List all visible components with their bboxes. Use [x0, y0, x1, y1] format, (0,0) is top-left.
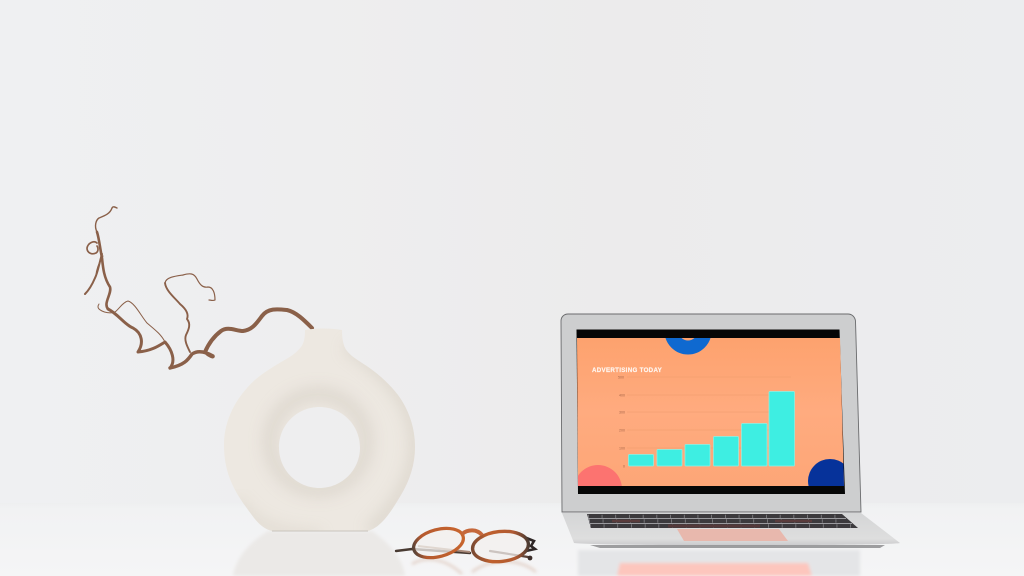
slide [577, 338, 844, 486]
glasses [396, 523, 535, 564]
axis labels: 400 [619, 394, 625, 398]
main branch [205, 309, 312, 352]
third branch [98, 301, 165, 342]
axis labels [618, 376, 625, 468]
temples [396, 549, 470, 553]
screen bezel [576, 330, 845, 494]
curly loop [87, 242, 98, 254]
right lens [471, 529, 530, 564]
slide title: ADVERTISING TODAY [592, 367, 663, 374]
plant branches [85, 207, 312, 368]
coral circle [578, 465, 622, 486]
slide background [577, 338, 844, 486]
axis labels: 200 [619, 428, 625, 432]
axis labels: 100 [619, 446, 625, 450]
vase body [224, 328, 416, 536]
keyboard [587, 514, 858, 528]
grid lines [627, 377, 794, 448]
axis labels: 300 [619, 410, 625, 414]
laptop reflection [578, 550, 860, 576]
vase shading [250, 353, 415, 530]
laptop base [562, 513, 900, 545]
vase reflection [233, 531, 405, 576]
side twig [85, 254, 102, 294]
left lens [410, 523, 467, 563]
glasses reflection [412, 559, 536, 574]
navy circle [808, 459, 844, 486]
laptop lid [561, 314, 861, 512]
axis labels: 0 [623, 464, 625, 468]
blue donut [666, 338, 710, 354]
laptop [561, 314, 900, 548]
scene: desk with vase, glasses and laptop [84, 206, 900, 576]
bar chart [628, 392, 794, 466]
axis labels: 500 [618, 376, 624, 380]
second branch [165, 283, 190, 352]
trackpad [677, 529, 788, 541]
bridge [462, 530, 482, 535]
table surface [0, 503, 1024, 576]
